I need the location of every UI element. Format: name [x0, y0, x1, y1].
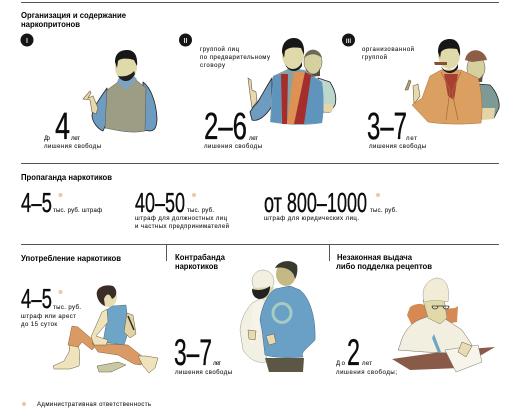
number: up to 4 years: лишения свободы: [44, 144, 101, 150]
heading: organising drug dens: Организация и содержание: [21, 11, 127, 20]
fine: 800–1000 thousand: тыс. руб.: [370, 208, 397, 214]
number: 3–7 years: 3–7: [367, 106, 407, 148]
heading: illegal prescriptions: [336, 253, 432, 271]
number: 3–7 years: лишения свободы: [175, 370, 232, 376]
badge I: [20, 34, 34, 46]
badge II: II: [184, 38, 187, 45]
number: up to 4 years: 4: [55, 106, 70, 148]
number: up to 2 years: лет: [362, 361, 372, 367]
number: up to 4 years: [44, 106, 101, 150]
text: organised group: организованной: [362, 46, 414, 53]
fine: 40–50 thousand: тыс. руб.: [187, 208, 214, 214]
panel: organising drug dens: [20, 11, 499, 150]
number: 2–6 years: лет: [249, 136, 258, 142]
heading: drug propaganda: Пропаганда наркотиков: [21, 173, 112, 182]
fine: 4–5 thousand: [21, 187, 102, 218]
text: group by prior agreement: группой лиц: [200, 46, 240, 53]
panel: illegal prescriptions: [336, 253, 495, 376]
number: up to 2 years: лишения свободы;: [336, 370, 397, 376]
icon: two men, striped vest: [248, 38, 336, 125]
badge III: III: [346, 38, 351, 45]
number: 2–6 years: 2–6: [204, 106, 247, 148]
icon: man in grey vest: [83, 50, 157, 132]
number: up to 4 years: До: [44, 136, 51, 142]
badge III: [342, 34, 355, 46]
number: up to 2 years: До: [336, 361, 346, 367]
number: 3–7 years: лишения свободы: [369, 144, 426, 150]
number: up to 2 years: 2: [347, 332, 360, 373]
number: 3–7 years: лет: [406, 136, 417, 142]
text: organised group: [362, 46, 414, 61]
panel: drug use: [21, 254, 158, 373]
fine: 4–5 thousand: 4–5: [21, 187, 52, 218]
heading: organising drug dens: [21, 11, 127, 29]
fine: 800–1000 thousand: штраф для юридических лиц.: [264, 216, 359, 222]
panel: drug smuggling: [174, 253, 315, 376]
number: 3–7 years: лет: [213, 361, 221, 367]
heading: drug use: Употребление наркотиков: [21, 254, 121, 263]
fine: 4–5 thousand or arrest: штраф или арест: [21, 314, 76, 320]
number: 2–6 years: лишения свободы: [204, 144, 262, 150]
badge I: I: [26, 38, 28, 45]
icon: two men, orange jacket: [405, 39, 499, 124]
heading: drug smuggling: наркотиков: [175, 262, 218, 271]
heading: organising drug dens: наркопритонов: [21, 20, 80, 29]
heading: drug smuggling: [175, 253, 226, 271]
fine: 40–50 thousand: 40–50: [135, 187, 185, 218]
fine: 800–1000 thousand: от 800–1000: [264, 187, 367, 218]
icon: two smugglers: [240, 261, 315, 372]
fine: 4–5 thousand or arrest: тыс. руб.: [53, 305, 81, 311]
heading: illegal prescriptions: Незаконная выдача: [337, 253, 413, 262]
text: group by prior agreement: сговору: [200, 63, 225, 69]
icon: doctor at desk: [392, 278, 495, 372]
heading: drug smuggling: Контрабанда: [175, 253, 226, 262]
fine: 40–50 thousand: и частных предпринимателей: [135, 223, 229, 230]
fine: 4–5 thousand or arrest: до 15 суток: [21, 322, 57, 328]
fine: 4–5 thousand or arrest: 4–5: [21, 283, 52, 314]
fine: 4–5 thousand or arrest: [21, 283, 81, 328]
number: up to 4 years: лет: [71, 136, 80, 142]
fine: 4–5 thousand: тыс. руб. штраф: [53, 208, 102, 214]
panel: drug propaganda: [21, 173, 397, 230]
heading: illegal prescriptions: либо подделка рецептов: [336, 262, 432, 271]
legend: administrative liability: Административная ответственность: [37, 402, 151, 408]
fine: 40–50 thousand: штраф для должностных лиц: [135, 216, 228, 222]
number: up to 2 years: [336, 332, 397, 376]
text: organised group: группой: [362, 54, 387, 61]
badge II: [179, 34, 192, 46]
text: group by prior agreement: по предварительному: [200, 55, 270, 61]
icon: seated woman: [53, 285, 158, 373]
fine: 40–50 thousand: [135, 187, 229, 230]
number: 3–7 years: 3–7: [174, 332, 212, 373]
text: group by prior agreement: [200, 46, 270, 69]
